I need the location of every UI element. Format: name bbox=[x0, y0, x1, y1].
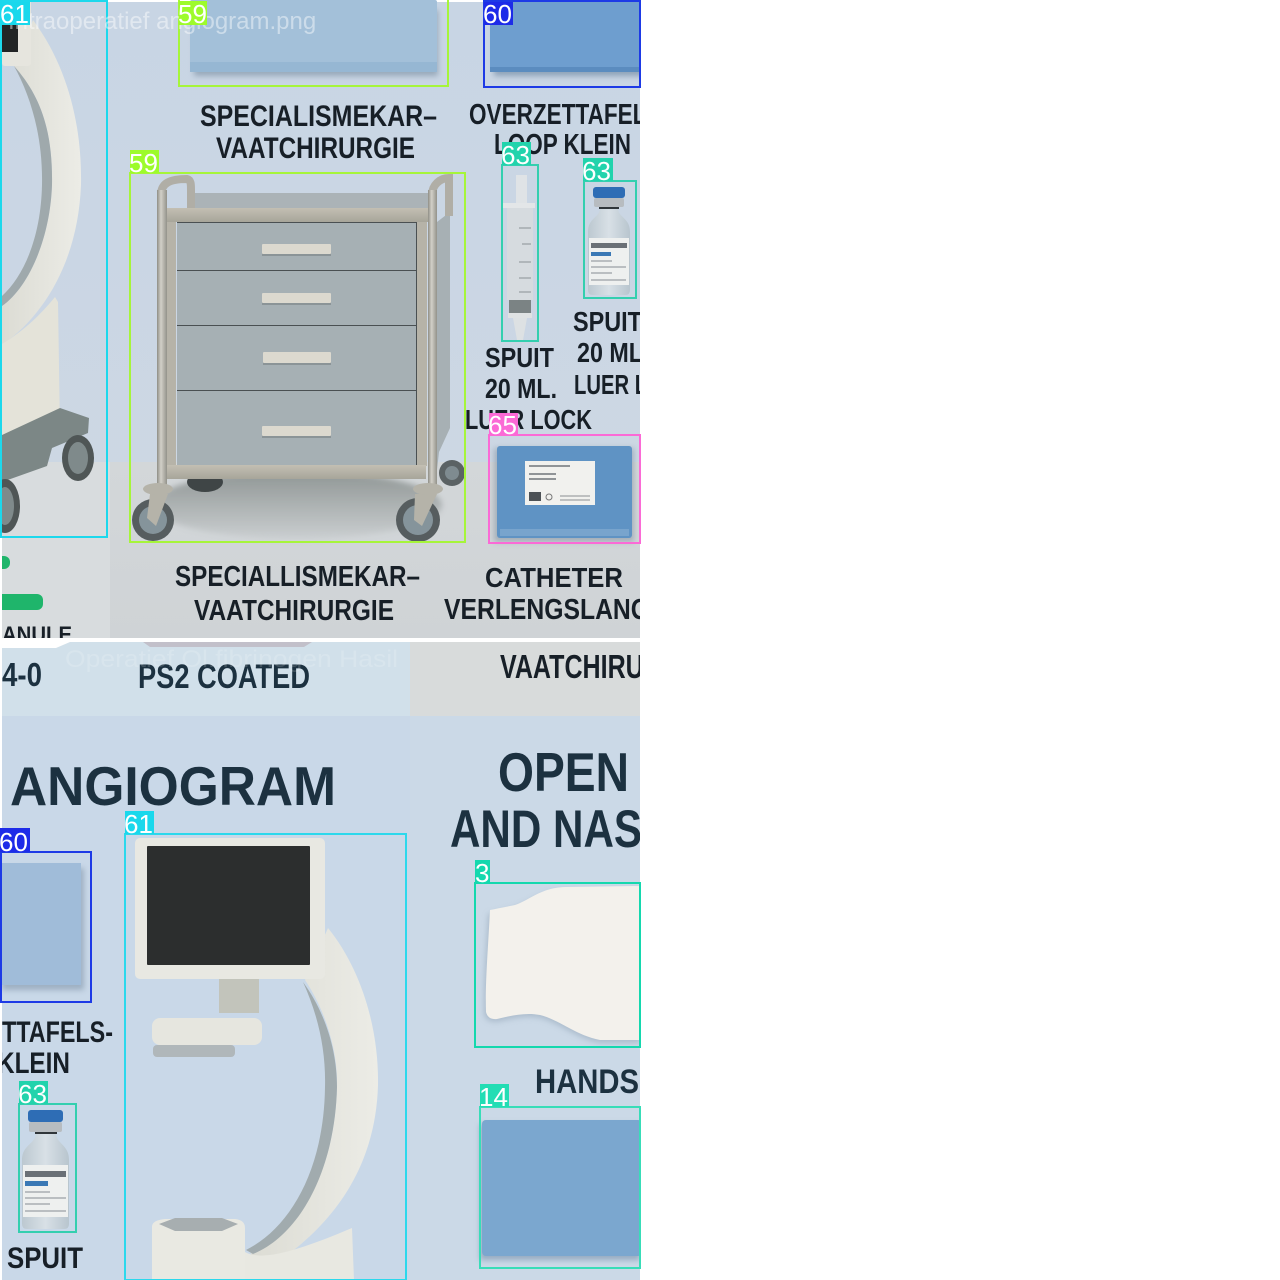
heading: catheter verlengslang bbox=[444, 568, 640, 620]
item: catheter pack bbox=[494, 446, 634, 542]
faint overlay caption: bottom panel: Operatief Ol.fibrinogen Hasil bbox=[65, 646, 398, 673]
item: C-arm, lower panel bbox=[135, 838, 378, 1280]
heading: speciallismekar vaatchirurgie: SPECIALLISMEKAR– bbox=[175, 561, 420, 593]
heading: specialismekar vaatchirurgie: VAATCHIRURGIE bbox=[216, 132, 415, 165]
panel: bottom collage crop bbox=[0, 642, 705, 1280]
item: green cannula parts bbox=[0, 556, 43, 610]
item: C-arm cropped, upper panel bbox=[0, 0, 94, 533]
heading: spuit 20 ml luer lock, right: 20 ML bbox=[577, 337, 643, 368]
heading: catheter verlengslang: CATHETER bbox=[485, 562, 623, 593]
heading: spuit 20 ml luer lock, right: LUER LOCK bbox=[574, 369, 692, 400]
heading: overzettafels loop klein: LOOP KLEIN bbox=[494, 129, 631, 161]
heading: size 4-0: 4-0 bbox=[2, 656, 42, 693]
panel: top collage crop bbox=[0, 0, 692, 647]
annotation labels: bottom panel bbox=[0, 809, 509, 1112]
item: vial, bottom bbox=[22, 1110, 69, 1229]
annotation labels: top panel: 65 bbox=[488, 410, 517, 440]
heading: spuit, bottom: SPUIT bbox=[7, 1242, 83, 1275]
annotation boxes: top panel bbox=[1, 0, 640, 543]
heading: specialismekar vaatchirurgie bbox=[200, 105, 436, 158]
heading: overzettafels loop klein bbox=[470, 104, 640, 154]
item: instrument trolley bbox=[132, 178, 465, 542]
item: pad, blue, right bbox=[480, 1120, 642, 1260]
heading: open and nas bbox=[451, 752, 640, 848]
heading: spuit 20 ml luer lock, left bbox=[466, 348, 592, 430]
heading: open and nas: OPEN bbox=[498, 741, 629, 803]
annotation labels: top panel: 59 bbox=[129, 148, 158, 178]
heading: spuit 20 ml luer lock, left: 20 ML. bbox=[485, 373, 557, 404]
heading: ANULE: ANULE bbox=[2, 622, 72, 647]
annotation labels: bottom panel: 3 bbox=[475, 858, 489, 888]
heading: overzettafels klein: TTAFELS- bbox=[2, 1016, 113, 1049]
annotation labels: bottom panel: 14 bbox=[479, 1082, 508, 1112]
heading: spuit 20 ml luer lock, left: LUER LOCK bbox=[465, 404, 592, 435]
heading: catheter verlengslang: VERLENGSLANG bbox=[444, 594, 650, 626]
heading: speciallismekar vaatchirurgie bbox=[176, 566, 420, 620]
item: vial bbox=[588, 187, 630, 295]
item: syringe bbox=[503, 175, 535, 340]
heading: spuit 20 ml luer lock, right: SPUIT bbox=[573, 306, 642, 337]
item: glove bbox=[484, 886, 640, 1043]
annotation labels: top panel bbox=[0, 0, 613, 440]
heading: angiogram: ANGIOGRAM bbox=[10, 755, 336, 817]
annotation labels: bottom panel: 63 bbox=[18, 1079, 47, 1109]
item: top pad, blue bbox=[490, 0, 654, 76]
heading: vaatchirurgie: VAATCHIRURGIE bbox=[500, 648, 705, 685]
heading: speciallismekar vaatchirurgie: VAATCHIRURGIE bbox=[194, 595, 394, 627]
annotation boxes: bottom panel bbox=[1, 834, 640, 1280]
item: pad, left bbox=[2, 863, 84, 990]
annotation labels: top panel: 63 bbox=[501, 140, 530, 170]
heading: overzettafels klein bbox=[2, 1021, 112, 1073]
annotation labels: top panel: 63 bbox=[582, 156, 611, 186]
heading: hands: HANDS bbox=[535, 1063, 639, 1101]
file name caption: top panel: Intraoperatief angiogram.png bbox=[8, 8, 316, 35]
heading: open and nas: AND NAS bbox=[450, 800, 642, 859]
item: top pad, light blue bbox=[190, 0, 438, 76]
annotation labels: bottom panel: 61 bbox=[124, 809, 153, 839]
heading: spuit 20 ml luer lock, left: SPUIT bbox=[485, 342, 554, 373]
heading: specialismekar vaatchirurgie: SPECIALISMEKAR– bbox=[200, 100, 437, 133]
heading: PS2 coated: PS2 COATED bbox=[138, 658, 310, 696]
heading: spuit 20 ml luer lock, right bbox=[574, 312, 640, 394]
heading: overzettafels loop klein: OVERZETTAFELS- bbox=[469, 99, 669, 131]
